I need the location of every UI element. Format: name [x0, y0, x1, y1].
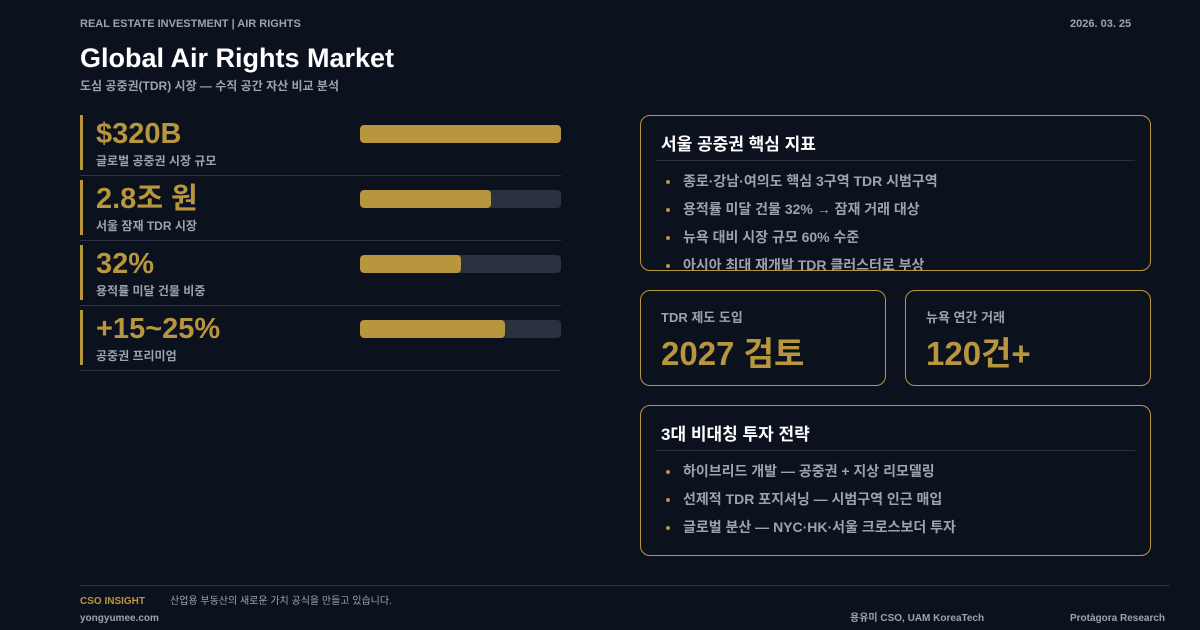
title: Global Air Rights Market — [80, 43, 394, 73]
metric row: +15~25%: +15~25% — [96, 313, 220, 345]
panel heading: 서울 공중권 핵심 지표 — [661, 135, 816, 154]
footer org: Protàgora Research — [1070, 613, 1165, 624]
bar — [360, 125, 561, 143]
strategy list: 선제적 TDR 포지셔닝 — 시범구역 인근 매입 — [683, 491, 942, 507]
metric row: +15~25% — [80, 310, 561, 365]
panel: Seoul key indicators — [640, 115, 1151, 271]
stat card: TDR intro: TDR 제도 도입 — [661, 310, 743, 325]
strategy list: 하이브리드 개발 — 공중권 + 지상 리모델링 — [683, 463, 935, 479]
footer tagline: 산업용 부동산의 새로운 가치 공식을 만들고 있습니다. — [170, 596, 392, 607]
footer site: yongyumee.com — [80, 613, 159, 624]
strategy list: 글로벌 분산 — NYC·HK·서울 크로스보더 투자 — [683, 519, 956, 535]
stat card: NY annual deals: 뉴욕 연간 거래 — [926, 310, 1005, 325]
metric row: 2.8조 원: 2.8조 원 — [96, 183, 198, 215]
bar — [360, 320, 561, 338]
metric row: 2.8조 원 — [80, 180, 561, 235]
subtitle: 도심 공중권(TDR) 시장 — 수직 공간 자산 비교 분석 — [80, 79, 339, 93]
category label: REAL ESTATE INVESTMENT | AIR RIGHTS — [80, 18, 301, 30]
stat card: TDR intro — [640, 290, 886, 386]
metric row: 32%: 32% — [96, 248, 154, 280]
bullet list: 용적률 미달 건물 32% → 잠재 거래 대상 — [683, 201, 920, 217]
bar — [360, 255, 561, 273]
bullet list: 종로·강남·여의도 핵심 3구역 TDR 시범구역 — [683, 173, 938, 189]
metric row: 32%: 용적률 미달 건물 비중 — [96, 284, 205, 298]
stat card: TDR intro: 2027 검토 — [661, 335, 804, 372]
panel heading: 3대 비대칭 투자 전략 — [661, 425, 810, 444]
metric row: $320B: 글로벌 공중권 시장 규모 — [96, 154, 216, 168]
date: 2026. 03. 25 — [1070, 18, 1131, 30]
metric row: 2.8조 원: 서울 잠재 TDR 시장 — [96, 219, 197, 233]
panel: 3 strategies — [640, 405, 1151, 556]
metric row: $320B: $320B — [96, 118, 181, 150]
metric row: +15~25%: 공중권 프리미엄 — [96, 349, 177, 363]
metric row: 32% — [80, 245, 561, 300]
stat card: NY annual deals: 120건+ — [926, 335, 1031, 372]
bullet list — [666, 173, 938, 271]
bullet list: 뉴욕 대비 시장 규모 60% 수준 — [683, 229, 859, 245]
footer author: 용유미 CSO, UAM KoreaTech — [850, 613, 984, 624]
bar — [360, 190, 561, 208]
metric row: $320B — [80, 115, 561, 170]
stat card: NY annual deals — [905, 290, 1151, 386]
footer brand: CSO INSIGHT — [80, 596, 145, 607]
strategy list — [666, 463, 956, 535]
